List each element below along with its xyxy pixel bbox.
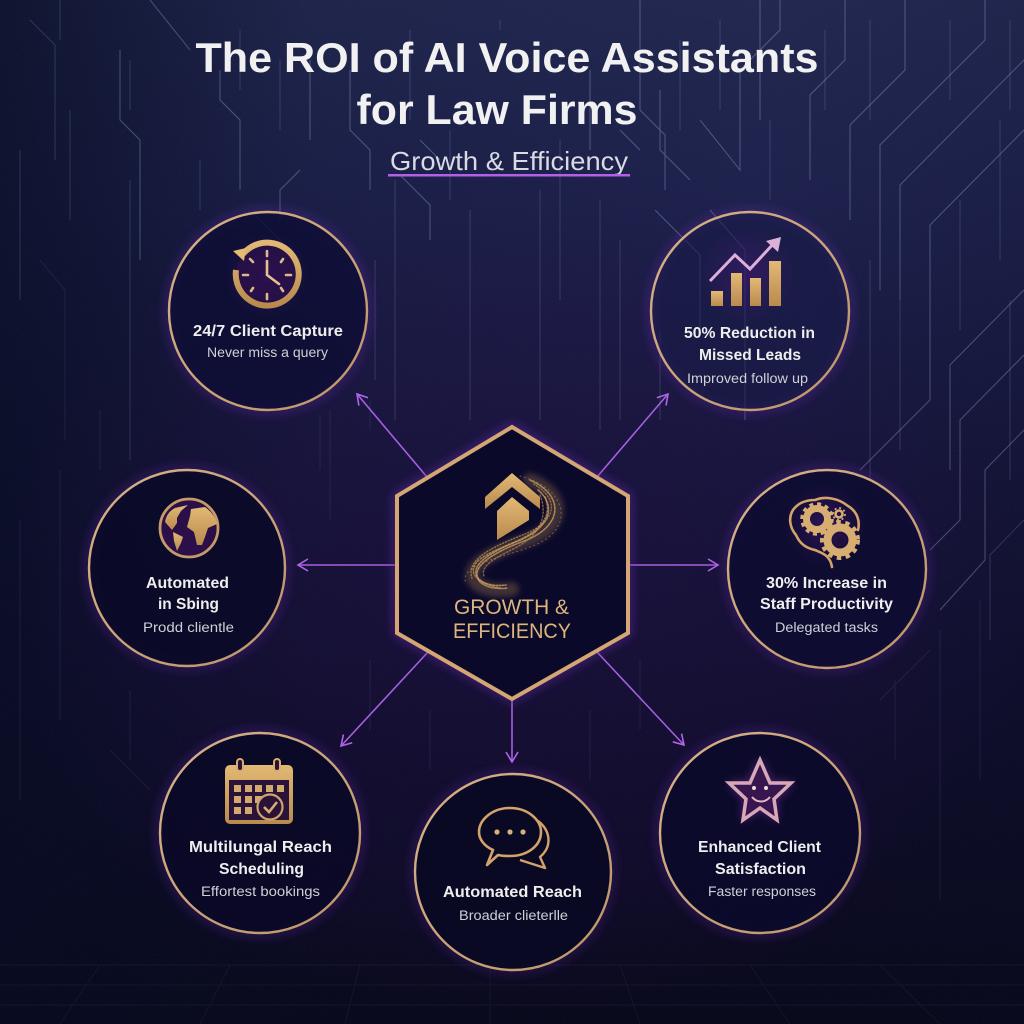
hexagon label: [453, 596, 571, 643]
subtitle: Growth & Efficiency: [390, 146, 628, 176]
icon: gold swirl: [465, 476, 561, 590]
heading: Scheduling: [219, 861, 304, 878]
subtext: Never miss a query: [207, 345, 328, 360]
title: for Law Firms: [356, 86, 638, 133]
heading: [146, 575, 229, 613]
heading: Multilungal Reach: [189, 839, 332, 856]
panel: central hexagon: [397, 427, 628, 699]
icon: globe: [160, 499, 218, 557]
heading: 24/7 Client Capture: [193, 323, 343, 340]
heading: [684, 325, 815, 364]
icon: calendar: [225, 759, 293, 824]
heading: Automated Reach: [443, 884, 582, 901]
subtext: Improved follow up: [687, 371, 808, 386]
heading: Satisfaction: [715, 861, 806, 878]
hexagon label: EFFICIENCY: [453, 620, 571, 643]
heading: [760, 575, 893, 613]
icon: bar chart with arrow: [700, 227, 796, 323]
panel: client satisfaction: [659, 732, 861, 934]
arrows: [298, 394, 718, 762]
subtext: Faster responses: [708, 884, 816, 899]
icon: brain with gears: [783, 483, 867, 567]
heading: Automated: [146, 575, 229, 592]
icon: gold chevron house: [485, 473, 540, 540]
panel: 50% reduction: [650, 211, 850, 411]
title: The ROI of AI Voice Assistants: [196, 34, 818, 81]
heading: 50% Reduction in: [684, 325, 815, 342]
icon: speech bubbles: [479, 808, 548, 868]
heading: [189, 839, 332, 878]
panel: 24/7 client capture: [168, 211, 368, 411]
subtext: Delegated tasks: [775, 620, 878, 635]
subtext: Prodd clientle: [143, 620, 234, 635]
heading: in Sbing: [158, 596, 219, 613]
icon: smiling star: [727, 758, 794, 822]
panel: automated intake: [88, 469, 286, 667]
icon: clock: [225, 233, 309, 317]
heading: Enhanced Client: [698, 839, 821, 856]
heading: 30% Increase in: [766, 575, 887, 592]
title: [196, 34, 818, 133]
subtext: Effortest bookings: [201, 884, 320, 899]
heading: Staff Productivity: [760, 596, 893, 613]
panel: automated reach: [414, 773, 612, 971]
panel: scheduling: [159, 732, 361, 934]
subtext: Broader clieterlle: [459, 908, 568, 923]
heading: [698, 839, 821, 878]
panel: staff productivity: [727, 469, 927, 669]
heading: Missed Leads: [699, 347, 801, 364]
hexagon label: GROWTH &: [454, 596, 569, 619]
